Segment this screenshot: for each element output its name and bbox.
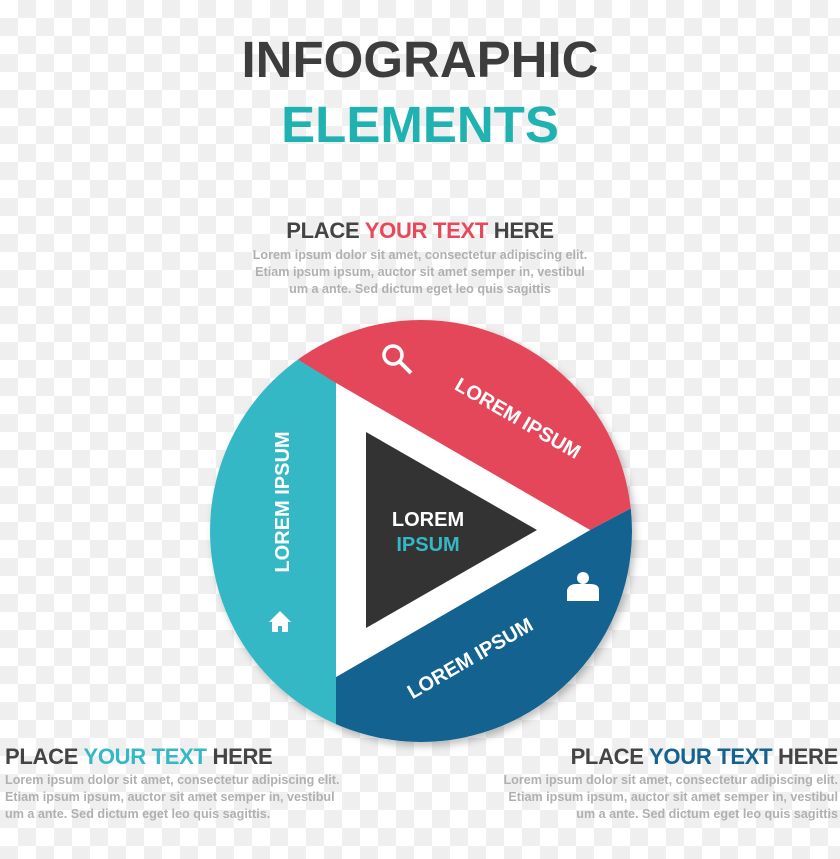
text block: bottom left — [5, 744, 340, 821]
label: cyan: LOREM IPSUM — [272, 431, 294, 573]
icon: user — [567, 572, 599, 601]
text block: bottom right: Etiam ipsum ipsum, auctor sit amet semper in, vestibul — [508, 790, 838, 804]
text block: top: Etiam ipsum ipsum, auctor sit amet semper in, vestibul — [255, 265, 585, 279]
icon: house — [269, 611, 291, 632]
text block: bottom left: um a ante. Sed dictum eget leo quis sagittis. — [5, 807, 270, 821]
text block: bottom right — [503, 744, 838, 821]
circle diagram — [209, 320, 639, 750]
segment: blue — [336, 508, 632, 742]
text block: top — [253, 218, 587, 296]
text block: bottom left: Etiam ipsum ipsum, auctor sit amet semper in, vestibul — [5, 790, 335, 804]
white triangle — [336, 383, 590, 677]
text block: bottom left: PLACE YOUR TEXT HERE — [5, 744, 272, 769]
text block: bottom left: Lorem ipsum dolor sit amet, consectetur adipiscing elit. — [5, 773, 340, 787]
dark triangle — [366, 432, 537, 628]
center text: LOREM — [392, 509, 464, 531]
text block: bottom right: um a ante. Sed dictum eget leo quis sagittis — [576, 807, 838, 821]
text block: top: Lorem ipsum dolor sit amet, consectetur adipiscing elit. — [253, 248, 587, 262]
label: blue: LOREM IPSUM — [404, 614, 537, 704]
segment: red — [298, 320, 631, 530]
text block: bottom right: PLACE YOUR TEXT HERE — [571, 744, 838, 769]
text block: bottom right: Lorem ipsum dolor sit amet, consectetur adipiscing elit. — [503, 773, 838, 787]
center text: IPSUM — [396, 534, 460, 556]
icon: magnifier — [384, 346, 411, 373]
subtitle: ELEMENTS — [281, 96, 559, 153]
title: INFOGRAPHIC — [242, 31, 598, 88]
text block: top: um a ante. Sed dictum eget leo quis sagittis — [289, 282, 551, 296]
center text — [392, 509, 464, 556]
label: red: LOREM IPSUM — [451, 374, 584, 464]
segment: cyan — [210, 338, 337, 724]
text block: top: PLACE YOUR TEXT HERE — [286, 218, 554, 243]
